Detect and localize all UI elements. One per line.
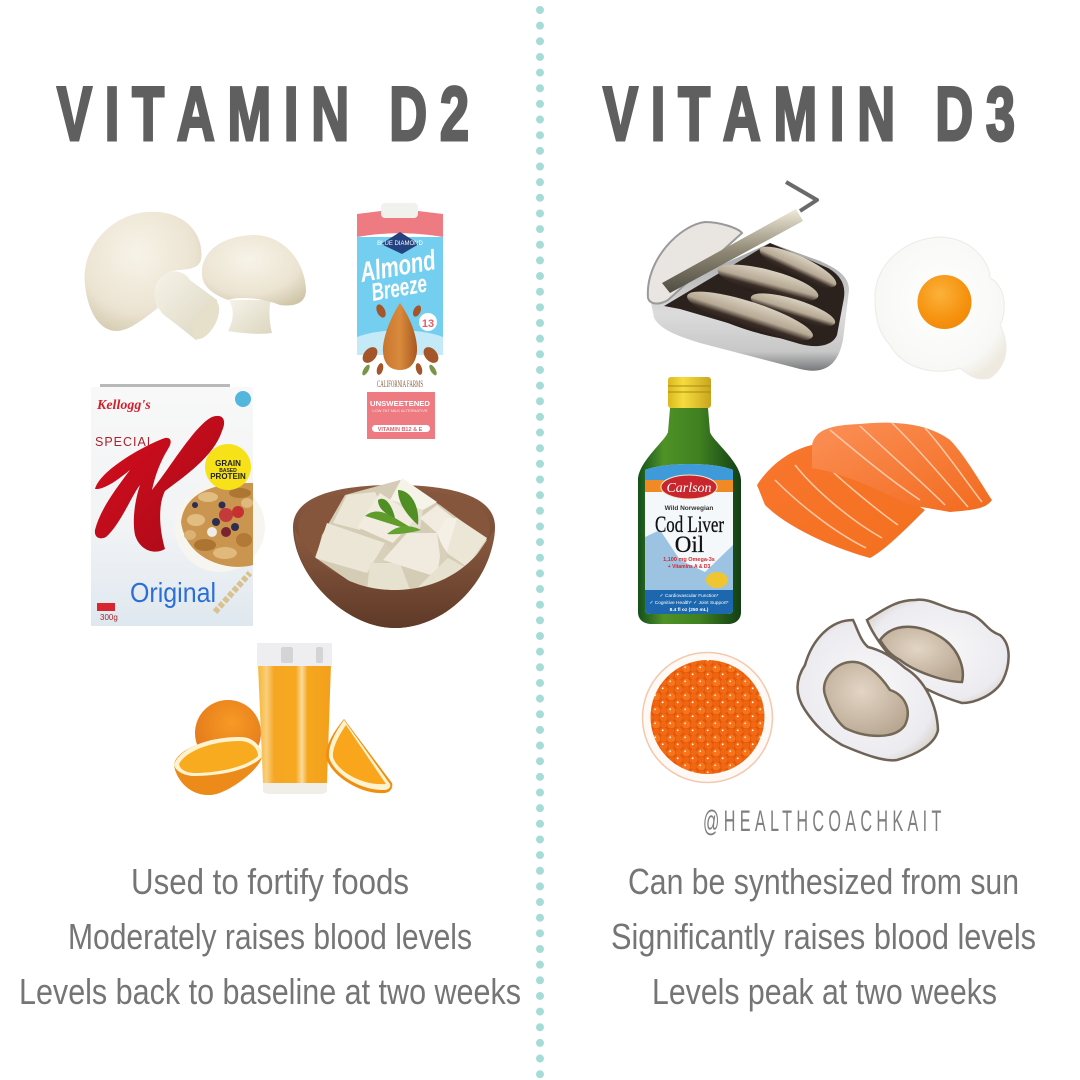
icon: mushrooms <box>85 212 306 343</box>
icon: tofu bowl <box>293 478 495 628</box>
icon: cod liver oil bottle: + Vitamins A & D3 <box>668 564 710 570</box>
icon: cod liver oil bottle: 8.4 fl oz (250 mL) <box>670 607 709 613</box>
icon: cod liver oil bottle <box>638 377 741 624</box>
icon: sardine tin <box>648 182 849 371</box>
icon: Special K cereal box: PROTEIN <box>210 472 246 481</box>
icon: Special K cereal box: Original <box>130 577 216 608</box>
icon: Special K cereal box: GRAIN <box>215 459 241 468</box>
icon: salmon fillets <box>757 423 992 558</box>
icon: Special K cereal box: SPECIAL <box>95 435 155 449</box>
text: handle @healthcoachkait: @HEALTHCOACHKAIT <box>703 805 946 838</box>
panel: Vitamin D3 foods <box>638 182 1009 782</box>
icon: cod liver oil bottle: Cod Liver <box>655 512 724 537</box>
icon: Almond Breeze carton <box>357 203 443 443</box>
icon: Almond Breeze carton: 13 <box>422 318 434 330</box>
icon: Special K cereal box: Kellogg's <box>96 398 151 413</box>
icon: Almond Breeze carton: CALIFORNIA FARMS <box>377 379 423 389</box>
icon: cod liver oil bottle: Wild Norwegian <box>665 505 713 512</box>
title: Vitamin D2: VITAMIN D2 <box>57 71 482 156</box>
icon: cod liver oil bottle: 1,100 mg Omega-3s <box>663 557 715 563</box>
icon: Special K cereal box: 300g <box>100 613 118 622</box>
icon: Special K cereal box: BASED <box>219 468 237 474</box>
icon: fried egg <box>875 237 1006 379</box>
text: Levels back to baseline at two weeks: Levels back to baseline at two weeks <box>19 971 521 1012</box>
text: Moderately raises blood levels: Moderately raises blood levels <box>68 916 472 957</box>
text: Used to fortify foods: Used to fortify foods <box>131 861 409 902</box>
icon: cod liver oil bottle: Oil <box>675 532 704 557</box>
panel: Vitamin D2 foods <box>85 203 495 795</box>
icon: Almond Breeze carton: LOW FAT MILK ALTERNATIVE <box>372 408 428 413</box>
icon: Almond Breeze carton: Almond <box>357 244 439 288</box>
title: Vitamin D3: VITAMIN D3 <box>603 71 1028 156</box>
icon: Almond Breeze carton: Breeze <box>369 270 429 307</box>
icon: cod liver oil bottle: Carlson <box>666 481 712 496</box>
icon: Almond Breeze carton: VITAMIN B12 & E <box>378 427 423 433</box>
icon: Special K cereal box <box>91 384 265 626</box>
panel: Vitamin D3 facts <box>611 861 1036 1012</box>
icon: salmon roe bowl <box>642 652 772 782</box>
icon: oysters <box>798 600 1009 760</box>
icon: orange juice and oranges <box>174 643 392 795</box>
icon: cod liver oil bottle: ✓ Cardiovascular Function* <box>660 593 719 599</box>
icon: Almond Breeze carton: UNSWEETENED <box>370 399 431 408</box>
panel: Vitamin D2 facts <box>19 861 521 1012</box>
text: Levels peak at two weeks: Levels peak at two weeks <box>652 971 997 1012</box>
icon: Almond Breeze carton: BLUE DIAMOND <box>377 241 423 247</box>
icon: cod liver oil bottle: ✓ Cognitive Health* ✓ Joint Support* <box>649 600 729 606</box>
